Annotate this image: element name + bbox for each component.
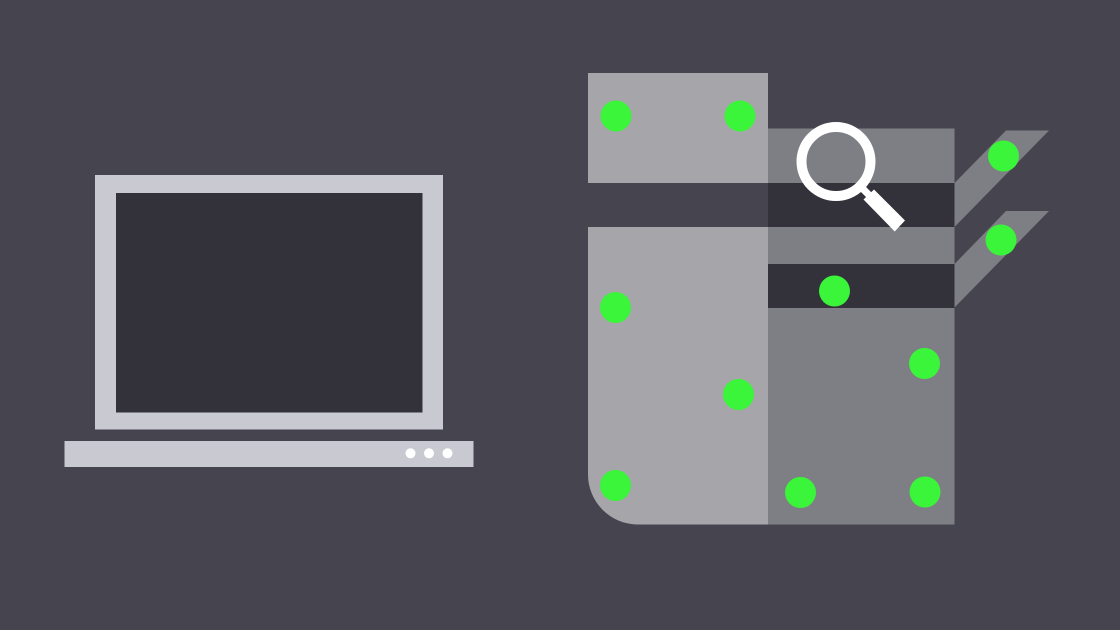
copier upper left panel — [588, 73, 768, 183]
laptop base — [64, 441, 474, 467]
icon: magnifying glass — [802, 127, 905, 232]
copier upper dark slot — [768, 183, 954, 227]
copier upper right panel — [768, 128, 954, 183]
copier lower right body — [768, 308, 954, 524]
laptop indicator lights — [406, 448, 452, 458]
upper paper tray — [954, 130, 1049, 227]
green markers — [600, 100, 1019, 508]
magnifier lens ring — [802, 127, 870, 196]
icon: copier machine — [588, 73, 1049, 524]
magnifier handle — [864, 190, 905, 232]
copier middle panel — [768, 227, 954, 264]
icon: laptop — [64, 175, 474, 467]
laptop display — [116, 193, 422, 412]
laptop screen bezel — [95, 175, 443, 430]
lower paper tray — [954, 211, 1049, 308]
copier lower left body — [588, 227, 768, 524]
magnifier neck — [859, 185, 872, 198]
copier lower dark slot — [768, 264, 954, 308]
